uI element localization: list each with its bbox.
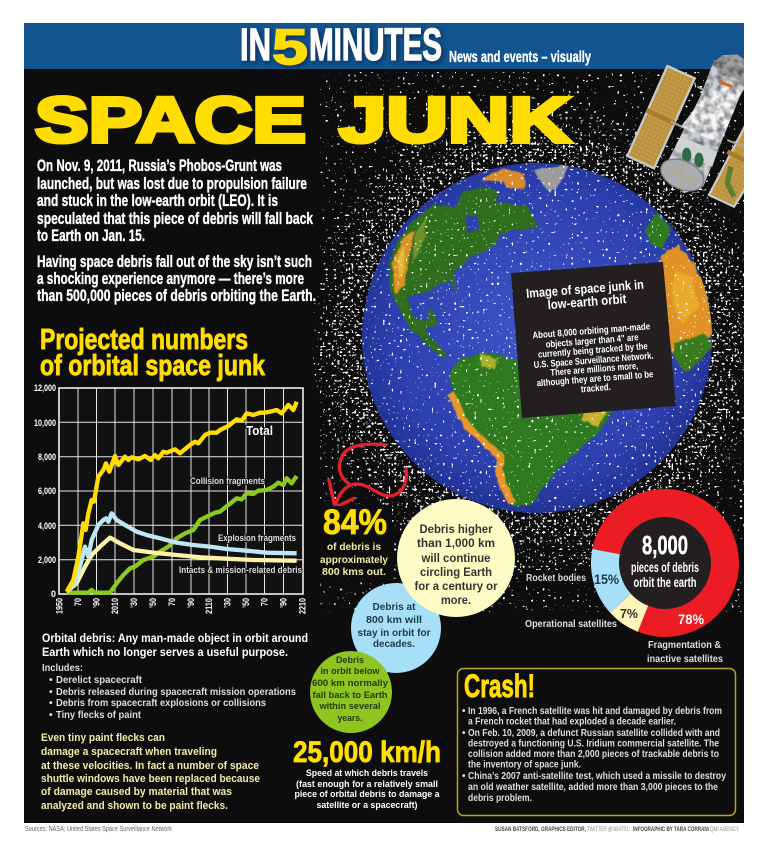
donut chart: 8,000 pieces: Operational satellites bbox=[525, 619, 617, 630]
paint flecks note bbox=[41, 732, 260, 812]
header band bbox=[24, 19, 744, 75]
circle: debris at 800 km: 800 km will bbox=[366, 614, 422, 626]
crash bullet list: destroyed a functioning U.S. Iridium commercial satellite. The bbox=[468, 738, 719, 750]
crash bullet list: • bbox=[462, 706, 466, 717]
donut center text: orbit the earth bbox=[634, 574, 696, 590]
stat: 84%: 84% bbox=[323, 503, 387, 542]
donut chart: 8,000 pieces: 15% bbox=[594, 571, 619, 587]
panel: crash bbox=[458, 668, 736, 816]
orbital debris definition: Earth which no longer serves a useful purpose. bbox=[42, 645, 288, 659]
donut chart: 8,000 pieces bbox=[525, 489, 739, 665]
orbital debris definition: Orbital debris: Any man-made object in orbit around bbox=[42, 631, 308, 645]
y axis labels: 12,000 bbox=[34, 383, 56, 393]
paint flecks note: analyzed and shown to be paint flecks. bbox=[41, 800, 228, 812]
circle: debris at 800 km: stay in orbit for bbox=[358, 627, 430, 639]
circle: debris below 600 km: within several bbox=[319, 701, 380, 712]
x axis labels: ’30 bbox=[129, 598, 140, 608]
title: Space Junk: JUNK bbox=[339, 84, 571, 156]
circle: debris at 800 km: decades. bbox=[373, 638, 415, 650]
x axis labels: ’30 bbox=[222, 598, 234, 608]
stat: 84%: of debris is bbox=[327, 541, 381, 553]
crash bullet list: On Feb. 10, 2009, a defunct Russian satellite collided with and bbox=[468, 728, 720, 739]
stat: 84%: 800 kms out. bbox=[322, 566, 386, 578]
header logo: In 5 Minutes: MINUTES bbox=[309, 19, 442, 70]
circle: debris higher than 1000 km: will continue bbox=[421, 551, 491, 565]
x axis labels: 70 bbox=[167, 598, 178, 606]
orbital debris definition: • bbox=[49, 686, 53, 698]
intro text: launched, but was lost due to propulsion failure bbox=[37, 175, 307, 193]
stat: 25,000 km/h: 25,000 km/h bbox=[293, 736, 441, 769]
orbital debris definition bbox=[42, 631, 308, 721]
donut chart: 8,000 pieces: Rocket bodies bbox=[526, 573, 586, 584]
paint flecks note: shuttle windows have been replaced because bbox=[41, 773, 260, 785]
x axis labels: 2110 bbox=[204, 598, 215, 614]
image info box, rotated: Image of space junk in bbox=[526, 277, 644, 301]
paint flecks note: Even tiny paint flecks can bbox=[41, 732, 165, 744]
hubble satellite illustration bbox=[627, 54, 747, 207]
x axis labels: 2210 bbox=[298, 598, 308, 614]
title: Space Junk: SPACE bbox=[35, 84, 306, 156]
series label: collision fragments: Collision fragments bbox=[190, 476, 265, 486]
x axis labels: 70 bbox=[73, 598, 84, 606]
circle: debris higher than 1000 km: more. bbox=[441, 593, 471, 607]
series label: explosion fragments: Explosion fragments bbox=[218, 533, 296, 543]
circle: debris below 600 km: Debris bbox=[336, 655, 364, 666]
circle: debris below 600 km: in orbit below bbox=[320, 666, 380, 677]
donut chart: 8,000 pieces: inactive satellites bbox=[647, 654, 723, 665]
x axis labels: 70 bbox=[260, 598, 270, 606]
orbital debris definition: • bbox=[49, 697, 53, 709]
chart grid bbox=[59, 388, 303, 594]
image info box, rotated bbox=[511, 262, 676, 418]
circle: debris higher than 1000 km: for a century or bbox=[414, 579, 498, 593]
crash bullet list: debris problem. bbox=[468, 793, 532, 804]
arctic islands bbox=[481, 168, 526, 188]
y axis labels: 6,000 bbox=[38, 486, 56, 496]
series: collision fragments bbox=[67, 476, 297, 593]
crash heading: Crash! bbox=[464, 668, 535, 704]
left solar panel bbox=[627, 66, 695, 168]
stat: 25,000 km/h: (fast enough for a relatively small bbox=[296, 779, 438, 790]
credits: INFOGRAPHIC BY TARA CORRAN/ bbox=[633, 826, 709, 833]
circle: debris higher than 1000 km: circling Earth bbox=[420, 565, 492, 579]
y axis labels: 0 bbox=[51, 589, 56, 599]
crash bullet list: the inventory of space junk. bbox=[468, 760, 581, 770]
crash bullet list: In 1996, a French satellite was hit and damaged by debris from bbox=[468, 706, 722, 717]
earth globe bbox=[362, 163, 714, 513]
donut center text: 8,000 bbox=[642, 530, 688, 560]
debris field around the earth bbox=[300, 69, 744, 629]
x axis labels: ’50 bbox=[241, 598, 252, 608]
x axis labels: ’90 bbox=[186, 598, 197, 608]
debris dots over the globe bbox=[362, 163, 712, 513]
orbital debris definition: Debris from spacecraft explosions or collisions bbox=[56, 697, 266, 709]
line chart: projected orbital debris 1950-2210 bbox=[34, 383, 308, 614]
segment: fragmentation 78% bbox=[592, 489, 739, 637]
y axis labels bbox=[34, 383, 56, 599]
crash bullet list bbox=[462, 706, 726, 804]
europe bbox=[644, 213, 671, 250]
intro text: a shocking experience anymore — there’s more bbox=[37, 270, 304, 288]
x axis labels: ’90 bbox=[92, 598, 102, 608]
x axis labels bbox=[54, 598, 308, 614]
image info box, rotated: U.S. Space Surveillance Network. bbox=[533, 351, 654, 371]
y axis labels: 8,000 bbox=[38, 452, 56, 462]
donut chart: 8,000 pieces: Fragmentation & bbox=[648, 640, 721, 651]
header logo: In 5 Minutes: IN bbox=[240, 19, 271, 70]
donut chart: 8,000 pieces: 7% bbox=[620, 606, 638, 621]
circle: debris below 600 km: years. bbox=[338, 713, 362, 724]
icon: red swirl arrow bbox=[329, 444, 406, 507]
image info box, rotated: although they are to small to be bbox=[536, 369, 654, 389]
title: Space Junk bbox=[35, 84, 571, 156]
orbital debris definition: Tiny flecks of paint bbox=[56, 709, 141, 721]
intro text bbox=[37, 157, 316, 305]
circle: debris below 600 km: fall back to Earth bbox=[312, 690, 388, 701]
intro text: to Earth on Jan. 15. bbox=[37, 227, 145, 245]
south america bbox=[449, 353, 617, 507]
chart heading bbox=[40, 324, 266, 382]
image info box, rotated: low-earth orbit bbox=[547, 291, 628, 312]
stat: 84% bbox=[318, 503, 392, 580]
crash bullet list: a French rocket that had exploded a decade earlier. bbox=[468, 716, 676, 728]
image info box, rotated: tracked. bbox=[580, 382, 611, 395]
orbital debris definition: Includes: bbox=[42, 662, 83, 674]
image info box, rotated: currently being tracked by the bbox=[538, 341, 648, 361]
series: total bbox=[67, 402, 297, 592]
intro text: and stuck in the low-earth orbit (LEO). It is bbox=[37, 192, 278, 210]
chart heading: Projected numbers bbox=[40, 324, 248, 356]
series: intacts and mission-related debris bbox=[67, 538, 297, 592]
stat: 25,000 km/h bbox=[293, 736, 441, 811]
circle: debris at 800 km: Debris at bbox=[372, 601, 416, 613]
crash bullet list: • bbox=[462, 771, 466, 782]
header logo: In 5 Minutes bbox=[240, 19, 442, 75]
x axis labels: 2010 bbox=[110, 598, 121, 614]
image info box, rotated: About 8,000 orbiting man-made bbox=[532, 321, 651, 341]
stat: 25,000 km/h: Speed at which debris travels bbox=[306, 768, 428, 779]
crash bullet list: an old weather satellite, added more than 3,000 pieces to the bbox=[468, 782, 718, 793]
circle: debris at 800 km bbox=[351, 583, 441, 673]
credits bbox=[495, 826, 739, 833]
circle: debris higher than 1000 km: Debris higher bbox=[420, 522, 493, 536]
series: explosion fragments bbox=[67, 513, 297, 592]
image info box, rotated: objects larger than 4" are bbox=[545, 332, 639, 350]
crash bullet list: collision added more than 2,000 pieces of trackable debris to bbox=[468, 749, 719, 760]
paint flecks note: of damage caused by material that was bbox=[41, 786, 232, 798]
circle: debris higher than 1000 km bbox=[397, 499, 515, 617]
y axis labels: 10,000 bbox=[34, 418, 56, 428]
sources: Sources: NASA; United States Space Surveillance Network bbox=[25, 826, 172, 833]
image info box, rotated: There are millions more, bbox=[550, 361, 639, 379]
stat: 84%: approximately bbox=[320, 554, 388, 566]
intro text: Having space debris fall out of the sky isn’t such bbox=[37, 253, 312, 271]
crash bullet list: China’s 2007 anti-satellite test, which used a missile to destroy bbox=[468, 771, 726, 782]
series label: total: Total bbox=[246, 424, 273, 438]
donut center text: pieces of debris bbox=[631, 559, 699, 575]
intro text: speculated that this piece of debris will fall back bbox=[37, 210, 314, 228]
stat: 25,000 km/h: satellite or a spacecraft) bbox=[316, 800, 418, 811]
paint flecks note: damage a spacecraft when traveling bbox=[41, 746, 217, 758]
segment: rocket bodies 15% bbox=[591, 549, 631, 613]
intro text: On Nov. 9, 2011, Russia’s Phobos-Grunt was bbox=[37, 157, 282, 175]
header tagline: News and events – visually bbox=[449, 49, 591, 66]
series label: intacts: Intacts & mission-related debris bbox=[179, 565, 302, 575]
orbital debris definition: Derelict spacecraft bbox=[56, 674, 142, 686]
north america bbox=[389, 187, 539, 358]
y axis labels: 2,000 bbox=[38, 555, 56, 565]
x axis labels: ’90 bbox=[278, 598, 290, 608]
circle: debris higher than 1000 km: than 1,000 km bbox=[417, 536, 495, 550]
donut chart: 8,000 pieces: 78% bbox=[678, 611, 705, 627]
segment: operational satellites 7% bbox=[610, 594, 648, 632]
x axis labels: ’50 bbox=[148, 598, 159, 608]
telescope body bbox=[660, 54, 744, 194]
header logo: In 5 Minutes: 5 bbox=[272, 19, 308, 75]
right solar panel bbox=[709, 122, 747, 207]
orbital debris definition: Debris released during spacecraft mission operations bbox=[56, 686, 296, 698]
circle: debris below 600 km bbox=[310, 651, 392, 733]
orbital debris definition: • bbox=[49, 674, 53, 686]
credits: QMI AGENCY bbox=[710, 826, 739, 833]
greenland bbox=[534, 165, 569, 193]
crash bullet list: • bbox=[462, 728, 466, 739]
credits: SUSAN BATSFORD, GRAPHICS EDITOR, bbox=[495, 826, 586, 833]
orbital debris definition: • bbox=[49, 709, 53, 721]
africa bbox=[661, 245, 714, 373]
paint flecks note: at these velocities. In fact a number of space bbox=[41, 760, 259, 772]
donut center text bbox=[631, 530, 699, 590]
credits: TWITTER @SBATS1; bbox=[587, 826, 630, 833]
chart heading: of orbital space junk bbox=[40, 350, 266, 382]
circle: debris below 600 km: 600 km normally bbox=[312, 678, 389, 689]
x axis labels: 1950 bbox=[54, 598, 66, 614]
intro text: than 500,000 pieces of debris orbiting the Earth. bbox=[37, 287, 316, 305]
y axis labels: 4,000 bbox=[38, 521, 56, 531]
stat: 25,000 km/h: piece of orbital debris to damage a bbox=[294, 789, 440, 800]
